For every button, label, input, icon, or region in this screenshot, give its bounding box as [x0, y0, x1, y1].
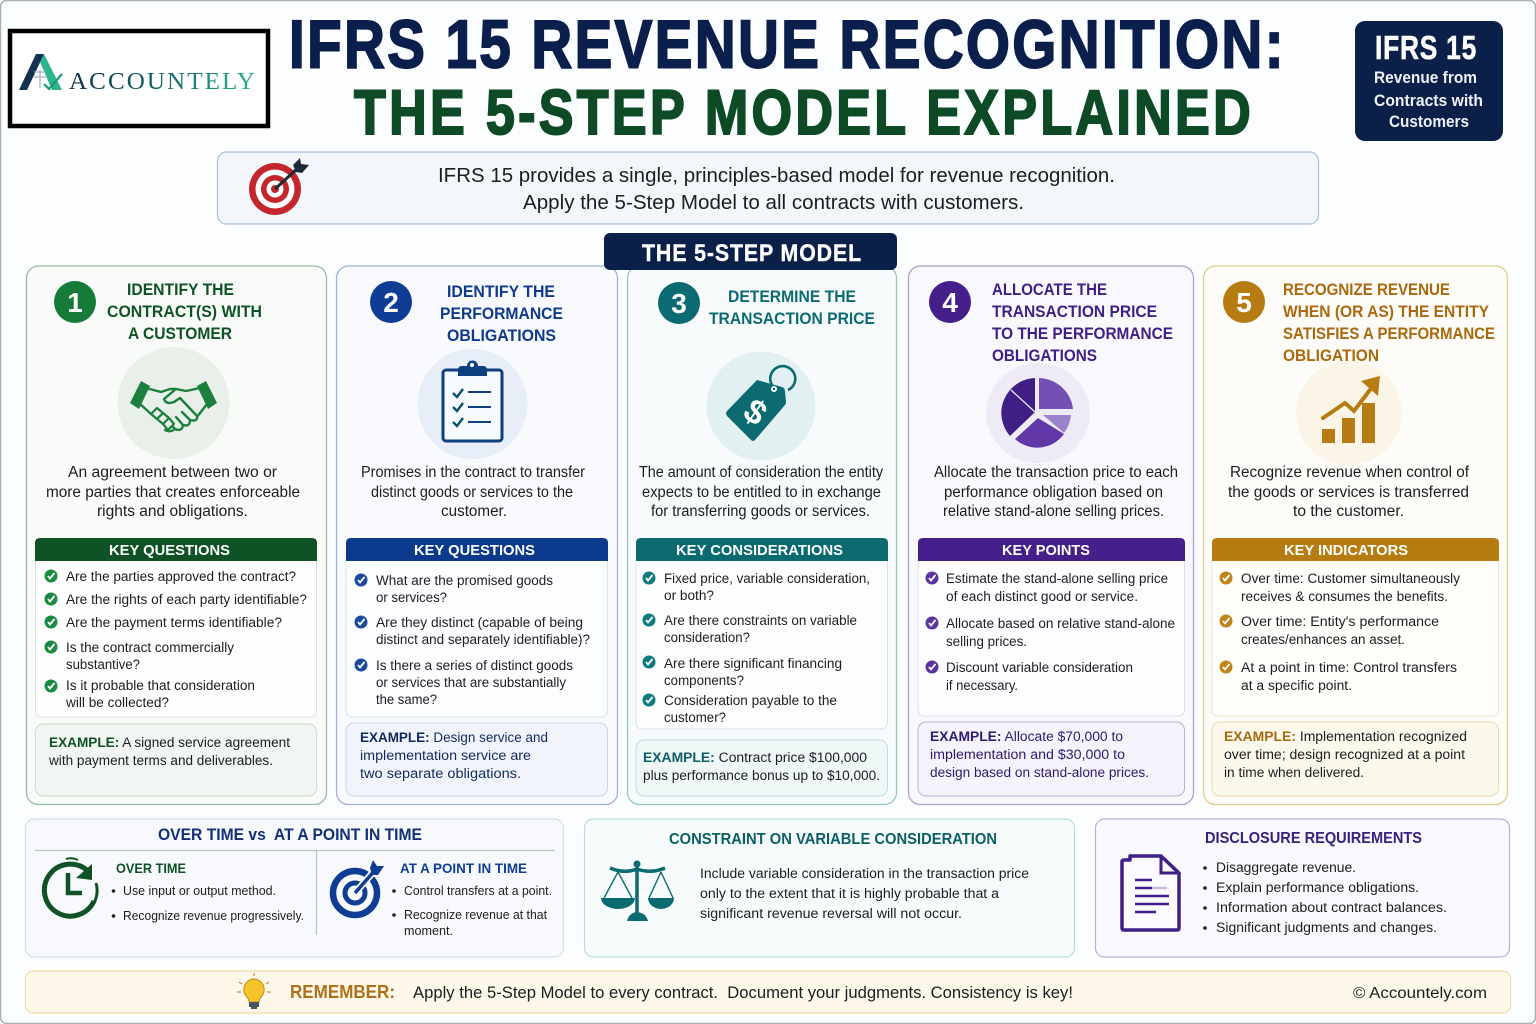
panel: step 1: [26, 266, 326, 804]
key considerations: step 3: consideration?: [664, 630, 750, 645]
key indicators: step 5: KEY INDICATORS: [1284, 542, 1408, 559]
key questions: step 1: [35, 538, 317, 717]
panel: over time vs at a point in time: OVER TIME vs AT A POINT IN TIME: [158, 826, 422, 844]
example: step 4: implementation and $30,000 to: [930, 747, 1125, 762]
heading: step 5: WHEN (OR AS) THE ENTITY: [1283, 303, 1489, 321]
key questions: step 2: Are they distinct (capable of being: [376, 615, 583, 630]
key considerations: step 3: Consideration payable to the: [664, 693, 837, 708]
key questions: step 2: What are the promised goods: [376, 573, 553, 588]
logo: Accountely: ACCOUNTELY: [69, 69, 257, 95]
title: IFRS 15 REVENUE RECOGNITION:: [289, 6, 1286, 82]
description: step 4: relative stand-alone selling prices.: [943, 503, 1164, 520]
over time column: Use input or output method.: [123, 884, 276, 898]
over time column: OVER TIME: [116, 860, 186, 876]
step number 4: [929, 281, 971, 323]
example: step 4: EXAMPLE: Allocate $70,000 to: [930, 729, 1123, 744]
heading: step 1: CONTRACT(S) WITH: [107, 303, 262, 321]
heading: step 4: TO THE PERFORMANCE: [992, 325, 1173, 343]
description: step 5: Recognize revenue when control of: [1230, 464, 1470, 481]
key points: step 4: if necessary.: [946, 678, 1018, 693]
key considerations: step 3: Fixed price, variable consideration,: [664, 571, 870, 586]
panel: disclosure requirements: Significant judgments and changes.: [1216, 920, 1437, 935]
badge: IFRS 15: Customers: [1389, 112, 1469, 131]
description: step 5: the goods or services is transferred: [1228, 484, 1469, 501]
description: step 2: [361, 464, 585, 520]
description: step 4: [934, 464, 1178, 520]
step number 2: 2: [383, 287, 399, 318]
icon: clock: [44, 858, 97, 916]
over time column: [112, 860, 304, 923]
key considerations: step 3: or both?: [664, 588, 714, 603]
panel: disclosure requirements: [1096, 819, 1510, 957]
icon: blue target: [333, 860, 384, 915]
panel: step 5: [1204, 266, 1508, 804]
key indicators: step 5: creates/enhances an asset.: [1241, 632, 1405, 647]
key questions: step 1: will be collected?: [65, 695, 169, 710]
example: step 3: EXAMPLE: Contract price $100,000: [643, 750, 867, 765]
panel: disclosure requirements: Information about contract balances.: [1216, 900, 1447, 915]
section header: the 5-step model: THE 5-STEP MODEL: [642, 240, 862, 267]
example: step 1: EXAMPLE: A signed service agreement: [49, 735, 290, 750]
key considerations: step 3: Are there significant financing: [664, 656, 842, 671]
remember bar: [26, 971, 1510, 1013]
description: step 1: rights and obligations.: [97, 503, 248, 520]
key indicators: step 5: Over time: Entity's performance: [1241, 614, 1439, 629]
icon: document: [1122, 856, 1179, 930]
title: THE 5-STEP MODEL EXPLAINED: [354, 78, 1254, 148]
key indicators: step 5: receives & consumes the benefits.: [1241, 589, 1448, 604]
icon: price tag: $: [736, 391, 774, 433]
key questions: step 2: KEY QUESTIONS: [414, 542, 535, 559]
key questions: step 1: Are the parties approved the contract?: [66, 569, 296, 584]
description: step 3: The amount of consideration the entity: [639, 464, 883, 481]
at a point in time column: AT A POINT IN TIME: [400, 860, 527, 876]
heading: step 1: IDENTIFY THE: [127, 281, 234, 299]
description: step 5: to the customer.: [1293, 503, 1404, 520]
key points: step 4: [918, 538, 1185, 716]
key questions: step 1: KEY QUESTIONS: [109, 542, 230, 559]
at a point in time column: Control transfers at a point.: [404, 884, 552, 898]
description: step 4: performance obligation based on: [944, 484, 1163, 501]
key questions: step 2: or services?: [376, 590, 447, 605]
panel: step 2: [336, 266, 618, 804]
heading: step 2: PERFORMANCE: [440, 305, 563, 323]
badge: IFRS 15: [1355, 21, 1503, 141]
remember bar: © Accountely.com: [1353, 985, 1487, 1002]
section header: the 5-step model: [604, 233, 897, 270]
step number 5: 5: [1236, 287, 1252, 318]
intro banner: IFRS 15 provides a single, principles-based model for revenue recognition.: [438, 165, 1115, 187]
description: step 1: An agreement between two or: [68, 464, 277, 481]
panel: constraint on variable consideration: Include variable consideration in the transaction price: [700, 866, 1029, 881]
title: [289, 6, 1286, 148]
description: step 2: customer.: [441, 503, 507, 520]
example: step 1: [36, 724, 316, 796]
heading: step 5: [1283, 281, 1495, 365]
example: step 4: design based on stand-alone prices.: [930, 765, 1149, 780]
icon: light bulb: [237, 973, 271, 1009]
panel: disclosure requirements: DISCLOSURE REQUIREMENTS: [1205, 830, 1422, 847]
logo: Accountely: [10, 31, 268, 126]
key points: step 4: Allocate based on relative stand-alone: [946, 616, 1175, 631]
intro banner: Apply the 5-Step Model to all contracts with customers.: [523, 192, 1024, 214]
description: step 5: [1228, 464, 1470, 520]
key questions: step 1: Are the rights of each party identifiable?: [66, 592, 307, 607]
example: step 2: two separate obligations.: [360, 766, 521, 781]
heading: step 1: A CUSTOMER: [128, 325, 232, 343]
example: step 2: implementation service are: [360, 748, 531, 763]
description: step 3: [639, 464, 883, 520]
icon: pie chart: [986, 363, 1090, 463]
description: step 1: more parties that creates enforceable: [46, 484, 300, 501]
at a point in time column: [392, 860, 552, 938]
key indicators: step 5: [1212, 538, 1499, 716]
example: step 4: [918, 722, 1184, 796]
key points: step 4: Discount variable consideration: [946, 660, 1133, 675]
remember bar: Apply the 5-Step Model to every contract. Document your judgments. Consistency is key!: [413, 984, 1073, 1002]
heading: step 2: OBLIGATIONS: [447, 327, 556, 345]
heading: step 3: TRANSACTION PRICE: [709, 310, 875, 328]
icon: scales: [601, 860, 674, 921]
step number 5: [1223, 281, 1265, 323]
key points: step 4: selling prices.: [946, 634, 1027, 649]
panel: constraint on variable consideration: CONSTRAINT ON VARIABLE CONSIDERATION: [669, 831, 997, 848]
heading: step 4: ALLOCATE THE: [992, 281, 1107, 299]
panel: constraint on variable consideration: only to the extent that it is highly probable that a: [700, 886, 1000, 901]
at a point in time column: moment.: [404, 924, 453, 938]
panel: disclosure requirements: Disaggregate revenue.: [1216, 860, 1356, 875]
step number 4: 4: [942, 287, 958, 318]
icon: handshake: [118, 347, 230, 459]
key indicators: step 5: at a specific point.: [1241, 678, 1352, 693]
key questions: step 2: the same?: [376, 692, 437, 707]
description: step 3: expects to be entitled to in exchange: [642, 484, 881, 501]
description: step 3: for transferring goods or services.: [651, 503, 870, 520]
step number 1: 1: [67, 287, 83, 318]
panel: step 3: [628, 266, 896, 804]
icon: price tag: [706, 352, 816, 460]
badge: IFRS 15: Contracts with: [1374, 91, 1483, 110]
over time column: Recognize revenue progressively.: [123, 909, 304, 923]
example: step 3: plus performance bonus up to $10,000.: [643, 768, 880, 783]
description: step 4: Allocate the transaction price to each: [934, 464, 1178, 481]
step number 1: [54, 281, 96, 323]
at a point in time column: Recognize revenue at that: [404, 908, 548, 922]
icon: clipboard checklist: [418, 349, 528, 459]
example: step 3: [636, 740, 888, 796]
remember bar: REMEMBER:: [290, 982, 395, 1002]
example: step 5: in time when delivered.: [1224, 765, 1364, 780]
key questions: step 1: Is it probable that consideration: [66, 678, 255, 693]
key considerations: step 3: KEY CONSIDERATIONS: [676, 542, 843, 559]
key questions: step 2: or services that are substantially: [376, 675, 566, 690]
example: step 2: EXAMPLE: Design service and: [360, 730, 548, 745]
heading: step 2: IDENTIFY THE: [447, 283, 555, 301]
key indicators: step 5: At a point in time: Control transfers: [1241, 660, 1457, 675]
panel: constraint on variable consideration: significant revenue reversal will not occur.: [700, 906, 962, 921]
heading: step 5: SATISFIES A PERFORMANCE: [1283, 325, 1495, 343]
step number 2: [370, 281, 412, 323]
heading: step 4: [992, 281, 1173, 365]
badge: IFRS 15: Revenue from: [1374, 68, 1477, 87]
key questions: step 1: Is the contract commercially: [66, 640, 234, 655]
key questions: step 2: distinct and separately identifiable)?: [376, 632, 590, 647]
panel: constraint on variable consideration: [584, 819, 1074, 957]
panel: step 4: [908, 266, 1194, 804]
badge: IFRS 15: IFRS 15: [1375, 29, 1477, 66]
key considerations: step 3: Are there constraints on variable: [664, 613, 857, 628]
key points: step 4: Estimate the stand-alone selling price: [946, 571, 1168, 586]
heading: step 1: [107, 281, 262, 343]
description: step 1: [46, 464, 300, 520]
description: step 2: distinct goods or services to the: [371, 484, 573, 501]
description: step 2: Promises in the contract to transfer: [361, 464, 585, 481]
heading: step 3: [709, 288, 875, 328]
heading: step 3: DETERMINE THE: [728, 288, 856, 306]
key questions: step 1: Are the payment terms identifiable?: [66, 615, 282, 630]
key considerations: step 3: customer?: [664, 710, 726, 725]
key questions: step 1: substantive?: [66, 657, 140, 672]
key indicators: step 5: Over time: Customer simultaneously: [1241, 571, 1460, 586]
key questions: step 2: Is there a series of distinct goods: [376, 658, 573, 673]
panel: over time vs at a point in time: [26, 819, 564, 957]
key considerations: step 3: [636, 538, 888, 729]
heading: step 5: RECOGNIZE REVENUE: [1283, 281, 1450, 299]
example: step 5: EXAMPLE: Implementation recognized: [1224, 729, 1467, 744]
heading: step 4: TRANSACTION PRICE: [992, 303, 1157, 321]
step number 3: [658, 282, 700, 324]
icon: red target: [249, 158, 309, 215]
key considerations: step 3: components?: [664, 673, 744, 688]
intro banner: [218, 152, 1318, 224]
key points: step 4: of each distinct good or service.: [946, 589, 1138, 604]
heading: step 2: [440, 283, 563, 345]
heading: step 5: OBLIGATION: [1283, 347, 1379, 365]
example: step 1: with payment terms and deliverables.: [48, 753, 273, 768]
step number 3: 3: [671, 288, 687, 319]
heading: step 4: OBLIGATIONS: [992, 347, 1097, 365]
key questions: step 2: [346, 538, 608, 717]
icon: growth chart: [1296, 361, 1402, 465]
example: step 5: over time; design recognized at a point: [1224, 747, 1465, 762]
panel: disclosure requirements: Explain performance obligations.: [1216, 880, 1419, 895]
key points: step 4: KEY POINTS: [1002, 542, 1090, 559]
example: step 2: [346, 723, 608, 796]
example: step 5: [1212, 722, 1498, 796]
